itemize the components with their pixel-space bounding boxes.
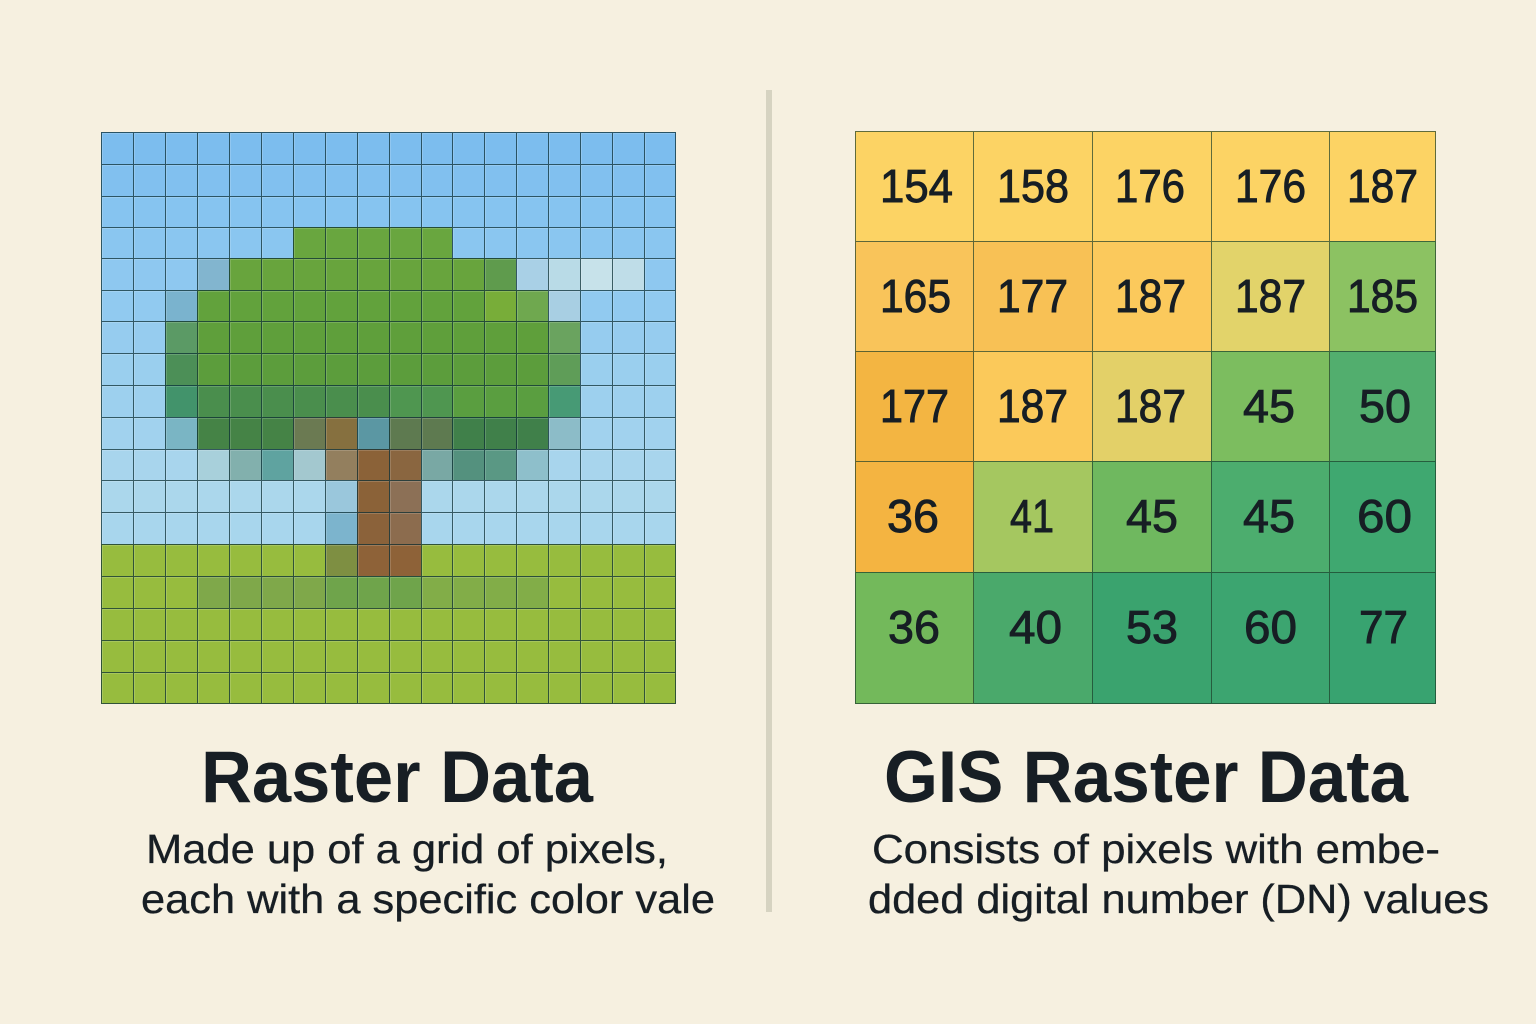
row 1 values: 176 bbox=[1115, 160, 1185, 212]
description: raster data: each with a specific color vale bbox=[141, 876, 715, 922]
row 3 values: 50 bbox=[1359, 380, 1411, 432]
row 4 values: 41 bbox=[1010, 490, 1054, 542]
center divider bbox=[766, 90, 772, 912]
row 1 values: 158 bbox=[997, 160, 1069, 212]
row 2 values: 185 bbox=[1347, 270, 1418, 322]
row 5 values: 60 bbox=[1244, 601, 1297, 653]
row 2 values: 187 bbox=[1235, 270, 1306, 322]
row 1 values: 154 bbox=[880, 160, 953, 212]
panel: gis raster data bbox=[855, 131, 1489, 922]
row 3 values bbox=[880, 380, 1411, 432]
row 4 values: 45 bbox=[1126, 490, 1178, 542]
row 1 values bbox=[880, 160, 1418, 212]
row 2 values: 177 bbox=[997, 270, 1068, 322]
heading: raster data: Raster Data bbox=[201, 737, 594, 818]
row 5 values bbox=[888, 601, 1408, 653]
row 2 values: 187 bbox=[1115, 270, 1186, 322]
row 1 values: 187 bbox=[1347, 160, 1418, 212]
description: raster data bbox=[141, 826, 715, 922]
row 4 values: 36 bbox=[887, 490, 939, 542]
pixel grid image: tree on grass under sky bbox=[101, 132, 676, 704]
row 5 values: 77 bbox=[1359, 601, 1408, 653]
row 5 values: 36 bbox=[888, 601, 940, 653]
row 3 values: 177 bbox=[880, 380, 949, 432]
row 4 values: 60 bbox=[1357, 490, 1412, 542]
row 3 values: 45 bbox=[1243, 380, 1295, 432]
description: gis raster data bbox=[868, 826, 1489, 922]
row 4 values bbox=[887, 490, 1412, 542]
heatmap cells bbox=[855, 131, 1436, 704]
row 4 values: 45 bbox=[1243, 490, 1295, 542]
row 2 values: 165 bbox=[880, 270, 951, 322]
description: raster data: Made up of a grid of pixels, bbox=[146, 826, 668, 872]
digital number grid bbox=[855, 131, 1436, 704]
row 2 values bbox=[880, 270, 1418, 322]
panel: raster data bbox=[101, 132, 715, 922]
heading: gis raster data: GIS Raster Data bbox=[884, 737, 1409, 818]
row 5 values: 40 bbox=[1009, 601, 1062, 653]
description: gis raster data: dded digital number (DN) values bbox=[868, 876, 1489, 922]
row 5 values: 53 bbox=[1126, 601, 1178, 653]
description: gis raster data: Consists of pixels with embe- bbox=[872, 826, 1440, 872]
row 1 values: 176 bbox=[1235, 160, 1306, 212]
row 3 values: 187 bbox=[997, 380, 1068, 432]
row 3 values: 187 bbox=[1115, 380, 1186, 432]
